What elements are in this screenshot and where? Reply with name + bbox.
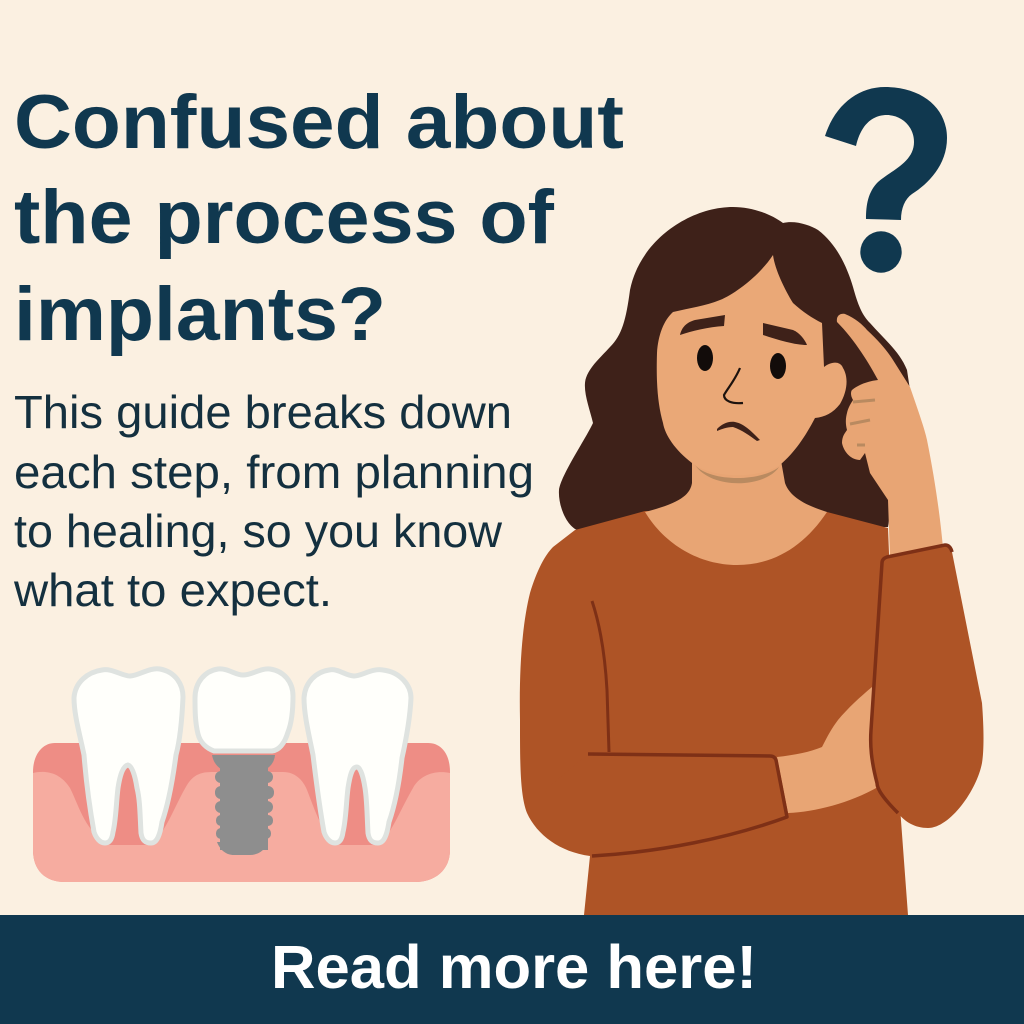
title: implants? [14, 272, 386, 357]
description text [13, 386, 534, 616]
bottom banner [0, 915, 1024, 1024]
left eyebrow [680, 315, 725, 335]
sweater fold [592, 601, 609, 752]
mouth [717, 422, 760, 441]
neck and chest [645, 455, 827, 565]
sweater torso [520, 511, 908, 915]
raised arm sleeve [871, 545, 984, 828]
title: Confused about [14, 80, 624, 165]
hand under arm [777, 687, 878, 813]
title [14, 80, 624, 357]
implant screw [212, 755, 275, 855]
description text: each step, from planning [14, 446, 534, 498]
gum front [33, 772, 450, 882]
nose [724, 368, 743, 403]
description text: to healing, so you know [14, 505, 503, 557]
lowered forearm [545, 754, 787, 856]
illustration: dental implant [33, 669, 450, 882]
right tooth [304, 670, 411, 843]
crown [195, 669, 293, 751]
eyes [697, 345, 786, 379]
gum back [33, 743, 450, 882]
icon: question mark [825, 87, 947, 273]
knuckle lines [850, 400, 875, 445]
right eyebrow [763, 323, 807, 345]
description text: This guide breaks down [14, 386, 512, 438]
raised arm and hand [837, 314, 943, 558]
hair [559, 207, 910, 530]
face [657, 255, 847, 475]
illustration: confused woman [520, 207, 984, 915]
description text: what to expect. [13, 564, 332, 616]
banner text: Read more here! [271, 933, 757, 1001]
title: the process of [14, 175, 555, 260]
left tooth [74, 669, 183, 843]
chin shadow [695, 465, 779, 483]
